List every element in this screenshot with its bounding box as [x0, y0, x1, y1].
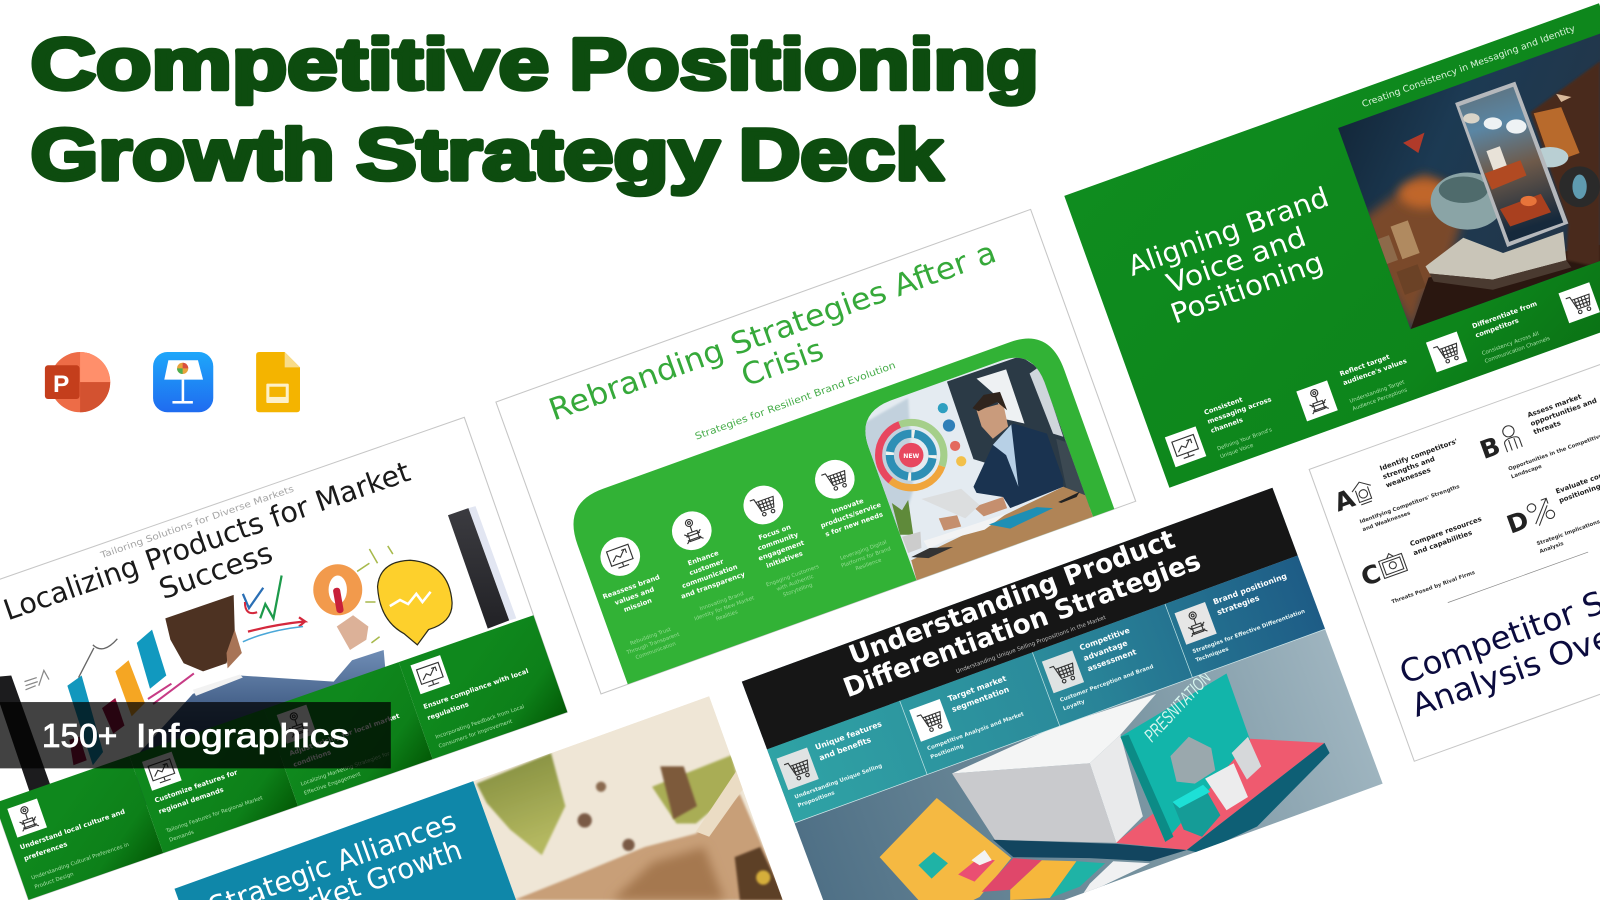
item: reflect target audience: Audience Perceptions	[1352, 387, 1408, 412]
green band of four columns: conditions	[292, 748, 332, 769]
slide text and green panel	[526, 226, 1114, 684]
band of four cells: Positioning	[930, 743, 965, 761]
item: consistent messaging: Defining Your Brand's	[1217, 427, 1273, 452]
column: community engagement: initiatives	[765, 550, 804, 570]
green band of four columns: Demands	[169, 830, 195, 844]
column: reassess brand: mission	[623, 597, 653, 614]
teal title panel with text	[174, 781, 578, 900]
title: Competitive	[31, 24, 549, 105]
column: innovate products: Innovate	[830, 497, 865, 516]
slide text and four items	[1080, 24, 1600, 476]
band of four cells: Propositions	[797, 790, 836, 809]
green band of four columns: Ensure compliance with local	[422, 667, 530, 711]
photo: 3D presentation boxes: PRESNITATION	[1140, 667, 1215, 746]
title text: Tailoring Solutions for Diverse Markets	[98, 485, 296, 562]
column: reassess brand: values and	[614, 585, 656, 607]
title	[31, 24, 1039, 196]
green band of four columns: Product Design	[34, 872, 74, 891]
title text	[0, 424, 567, 900]
badge: 150+ Infographics: 150+	[42, 718, 117, 755]
band of four cells: Competitive	[1078, 626, 1131, 652]
badge: 150+ Infographics	[0, 702, 391, 768]
column: community engagement: Engaging Customers	[765, 564, 820, 588]
item D: D	[1503, 505, 1533, 539]
column: enhance communication: customer	[688, 557, 725, 577]
band of four cells: and benefits	[818, 735, 873, 762]
icon: Keynote	[153, 352, 213, 412]
column: enhance communication: Innovating Brand	[699, 591, 745, 612]
band of four cells: advantage	[1082, 639, 1129, 663]
green band of four columns: Tailoring Features for Regional Market	[164, 795, 264, 835]
column: innovate products: Resilience	[855, 558, 882, 572]
item C: Threats Posed by Rival Firms	[1391, 570, 1476, 605]
column: community engagement: Storytelling	[782, 582, 813, 598]
title: Growth	[31, 115, 335, 196]
green band of four columns: Adjust pricing for local market	[288, 712, 401, 758]
photo: man drawing on whiteboard	[0, 506, 516, 806]
item A: A	[1330, 484, 1359, 517]
green band of four columns: regulations	[426, 700, 470, 722]
title text: Success	[155, 536, 277, 606]
item: consistent messaging: channels	[1210, 416, 1244, 435]
item C: Compare resources	[1409, 515, 1483, 548]
green band of four columns	[0, 615, 567, 900]
green band of four columns: Customize features for	[154, 768, 239, 805]
badge: 150+ Infographics: Infographics	[136, 718, 349, 755]
four icon columns	[585, 449, 903, 665]
slide text and four items: Voice and	[1162, 220, 1310, 300]
band of four cells: assessment	[1086, 647, 1138, 673]
item: consistent messaging: Consistent	[1203, 395, 1245, 417]
item: differentiate: Consistency Across All	[1481, 331, 1540, 357]
column: community engagement: with Authentic	[776, 574, 815, 593]
item B: Assess market	[1526, 392, 1583, 419]
slide text and green panel: Rebranding Strategies After a	[544, 235, 1001, 428]
item: reflect target audience: Reflect target	[1339, 353, 1391, 378]
band of four cells: Strategies for Effective Differentiation	[1192, 609, 1306, 655]
item: reflect target audience: Understanding Target	[1349, 379, 1405, 405]
column: reassess brand: Communication	[635, 641, 677, 661]
column: enhance communication: Identity for New Market	[694, 595, 755, 622]
black header and teal cells: Understanding Product	[845, 524, 1179, 671]
column: reassess brand: Through Transparent	[625, 632, 681, 657]
slide: rebranding strategies	[496, 209, 1143, 694]
column: innovate products	[801, 449, 900, 579]
item: reflect target audience	[1295, 348, 1417, 428]
slide text and four items: Creating Consistency in Messaging and Identity	[1361, 24, 1577, 110]
band of four cells: strategies	[1216, 593, 1261, 617]
item A: strengths and	[1382, 455, 1436, 481]
item B: opportunities and	[1529, 397, 1598, 428]
item D	[1501, 460, 1600, 562]
photo: businessman at desk	[865, 358, 1093, 580]
item B: Landscape	[1510, 464, 1543, 480]
item: differentiate	[1425, 300, 1551, 381]
column: innovate products: Leveraging Digital	[839, 540, 888, 562]
green band of four columns: regional demands	[157, 786, 225, 816]
photo: businessman at desk: NEW	[903, 453, 919, 460]
icon: PowerPoint	[45, 352, 110, 412]
band of four cells: Techniques	[1195, 646, 1230, 664]
column: enhance communication	[655, 500, 758, 631]
band of four cells: segmentation	[950, 685, 1010, 714]
photo: world map and handshake	[473, 696, 814, 900]
item A	[1328, 437, 1476, 539]
slide text and green panel: Strategies for Resilient Brand Evolution	[694, 360, 897, 443]
item: differentiate: Communication Channels	[1484, 336, 1551, 365]
column: enhance communication: communication	[681, 563, 739, 590]
slide: strategic alliances	[174, 696, 814, 900]
column: enhance communication: Realities	[715, 609, 739, 623]
item: differentiate: Differentiate from	[1471, 300, 1538, 330]
slide: aligning brand voice	[1064, 0, 1600, 488]
item: consistent messaging: Unique Voice	[1219, 443, 1254, 460]
slide: product differentiation	[741, 486, 1383, 900]
photo: phone, cup and book collage	[1338, 34, 1600, 330]
column: reassess brand: Rebuilding Trust	[629, 627, 672, 647]
item: reflect target audience: audience's values	[1342, 357, 1408, 387]
green band of four columns: Understanding Cultural Preferences in	[31, 842, 130, 881]
green band of four columns: Consumers for Improvement	[438, 719, 513, 750]
item B: threats	[1532, 419, 1562, 436]
item A: Identifying Competitors' Strengths	[1359, 484, 1461, 525]
column: enhance communication: and transparency	[680, 570, 747, 601]
icon: PowerPoint: P	[53, 371, 69, 398]
slide text and four items: Aligning Brand	[1123, 181, 1333, 283]
column: community engagement: engagement	[757, 539, 806, 563]
band of four cells: Understanding Unique Selling	[794, 763, 883, 801]
column: community engagement: community	[757, 530, 800, 553]
item A: weaknesses	[1385, 466, 1432, 489]
column: community engagement: Focus on	[757, 523, 792, 542]
item: consistent messaging: messaging across	[1206, 395, 1273, 426]
title: Positioning	[569, 24, 1039, 105]
item: differentiate: competitors	[1474, 317, 1520, 339]
column: innovate products: products/service	[819, 501, 883, 530]
green band of four columns: Incorporating Feedback from Local	[435, 704, 525, 741]
green band of four columns: Localizing Marketing Strategies for	[300, 751, 391, 788]
item C	[1355, 515, 1499, 612]
band of four cells	[767, 555, 1325, 823]
item C: C	[1357, 559, 1385, 592]
slide: competitor analysis	[1309, 277, 1600, 761]
item: partially cropped fourth column	[1557, 272, 1600, 323]
item C: and capabilities	[1412, 529, 1473, 557]
band of four cells: Unique features	[814, 719, 883, 752]
item B	[1474, 388, 1600, 487]
item: consistent messaging	[1160, 386, 1285, 476]
green band of four columns: Understand local culture and	[19, 808, 126, 852]
column: community engagement	[734, 476, 825, 603]
column: reassess brand: Reassess brand	[602, 573, 661, 601]
band of four cells: Competitive Analysis and Market	[927, 711, 1025, 752]
column: innovate products: s for new needs	[824, 510, 884, 538]
slide text and green panel: Crisis	[737, 332, 828, 394]
column: innovate products: Platforms for Brand	[841, 546, 892, 569]
item D: Analysis	[1539, 541, 1565, 555]
band of four cells: Target market	[947, 674, 1008, 703]
icon: Google Slides	[256, 352, 300, 412]
column: reassess brand	[585, 528, 684, 665]
item A: and Weaknesses	[1362, 510, 1411, 533]
black header and teal cells	[741, 486, 1325, 823]
green band of four columns: Effective Engagement	[303, 771, 362, 797]
slide: localizing products	[0, 417, 567, 900]
title: Strategy	[356, 115, 719, 196]
title: Deck	[739, 115, 944, 196]
item A: Identify competitors'	[1379, 437, 1459, 473]
item B: B	[1476, 431, 1504, 465]
black header and teal cells: Understanding Unique Selling Propositions in the Market	[955, 615, 1108, 675]
black header and teal cells: Differentiation Strategies	[839, 545, 1205, 704]
photo: 3D presentation boxes	[880, 667, 1330, 900]
slide text and four items: Positioning	[1166, 246, 1328, 330]
green band of four columns: preferences	[23, 840, 68, 863]
column: enhance communication: Enhance	[687, 549, 720, 567]
band of four cells: Loyalty	[1062, 699, 1086, 712]
band of four cells: Customer Perception and Brand	[1059, 664, 1155, 704]
title text: Localizing Products for Market	[0, 455, 414, 627]
band of four cells: Brand positioning	[1212, 571, 1288, 607]
